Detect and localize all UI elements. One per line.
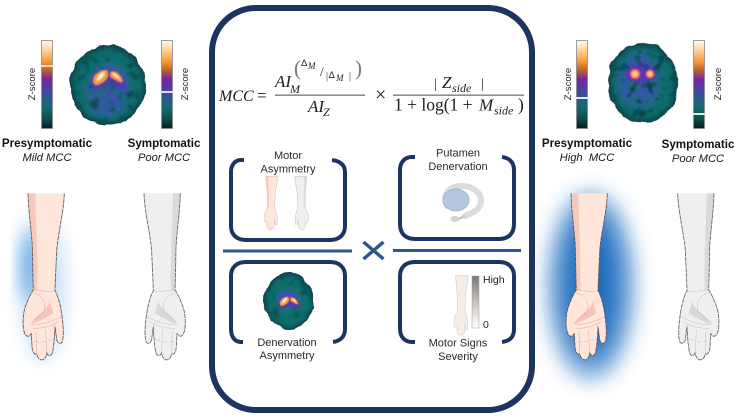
brain scan: mini bbox=[264, 273, 314, 329]
arm: right gray bbox=[678, 193, 719, 360]
formula: MCC equation: ) bbox=[518, 94, 524, 114]
quadrant: motor asymmetry: Motor bbox=[274, 150, 302, 162]
formula: MCC equation: × bbox=[375, 84, 386, 106]
right glow: high denervation bbox=[549, 191, 633, 383]
label: left symptomatic: Poor MCC bbox=[138, 152, 191, 164]
divider right bbox=[393, 249, 521, 252]
formula: MCC equation: ( bbox=[294, 56, 301, 80]
quadrant: motor asymmetry: Asymmetry bbox=[260, 164, 316, 176]
quadrant: denervation asymmetry: Denervation bbox=[257, 337, 317, 349]
formula: MCC equation: Δ bbox=[301, 58, 308, 69]
colorbar: symptomatic right: Z-score bbox=[713, 68, 724, 100]
severity scale bbox=[472, 274, 505, 331]
formula: MCC equation: M bbox=[307, 61, 316, 71]
divider left bbox=[223, 250, 352, 252]
colorbar: presymptomatic left: Z-score bbox=[27, 68, 38, 100]
quadrant: motor signs severity: Severity bbox=[438, 351, 478, 363]
severity scale: 0 bbox=[483, 319, 489, 331]
formula: MCC equation: MCC bbox=[218, 88, 254, 105]
label: left presymptomatic: Mild MCC bbox=[22, 152, 72, 164]
quadrant: motor asymmetry bbox=[231, 150, 345, 240]
formula: MCC equation: M bbox=[335, 73, 344, 83]
formula: MCC equation: | bbox=[349, 71, 351, 82]
colorbar: symptomatic right bbox=[692, 40, 724, 128]
arm: right pink bbox=[566, 193, 607, 360]
label: right symptomatic: Symptomatic bbox=[662, 138, 735, 151]
colorbar: presymptomatic right bbox=[563, 40, 589, 128]
label: right symptomatic bbox=[662, 138, 735, 165]
quadrant: putamen denervation: Denervation bbox=[428, 161, 488, 173]
formula: MCC equation: 1 + log(1 + bbox=[394, 94, 473, 114]
severity scale: High bbox=[483, 274, 505, 286]
formula: MCC equation: M bbox=[478, 96, 494, 114]
colorbar: symptomatic left: Z-score bbox=[180, 68, 191, 100]
label: right presymptomatic: High MCC bbox=[560, 152, 615, 164]
formula: MCC equation: Δ bbox=[328, 70, 336, 81]
colorbar: presymptomatic right: Z-score bbox=[563, 68, 574, 100]
formula: MCC equation: AI bbox=[307, 97, 325, 116]
quadrant: denervation asymmetry: Asymmetry bbox=[260, 350, 315, 362]
label: left symptomatic: Symptomatic bbox=[128, 137, 201, 150]
formula: MCC equation: | bbox=[326, 71, 328, 82]
mini arm: gray bbox=[295, 176, 308, 230]
formula: MCC equation: Z bbox=[323, 105, 330, 119]
mini arm: pink bbox=[264, 176, 278, 230]
label: right symptomatic: Poor MCC bbox=[672, 153, 725, 165]
formula: MCC equation: side bbox=[452, 81, 472, 95]
formula: MCC equation: = bbox=[257, 86, 267, 105]
arm: left gray bbox=[144, 193, 185, 360]
formula: MCC equation: | bbox=[481, 77, 484, 92]
label: left presymptomatic bbox=[2, 137, 93, 164]
formula: MCC equation: | bbox=[434, 77, 437, 92]
label: right presymptomatic: Presymptomatic bbox=[542, 137, 633, 150]
left scan group bbox=[27, 40, 191, 128]
label: right presymptomatic bbox=[542, 137, 633, 164]
mini arm: severity bbox=[454, 275, 468, 336]
formula: MCC equation: side bbox=[494, 104, 514, 118]
quadrant: putamen denervation bbox=[400, 148, 514, 239]
icon: multiply cross bbox=[364, 242, 384, 259]
colorbar: presymptomatic left bbox=[27, 40, 54, 128]
brain scan: left bbox=[70, 45, 146, 125]
formula: MCC equation: Z bbox=[442, 73, 452, 92]
quadrant: motor signs severity: Motor Signs bbox=[429, 338, 488, 350]
label: left symptomatic bbox=[128, 137, 201, 164]
formula: MCC equation: AI bbox=[274, 72, 292, 91]
label: left presymptomatic: Presymptomatic bbox=[2, 137, 93, 150]
brain scan: right bbox=[604, 40, 682, 126]
quadrant: putamen denervation: Putamen bbox=[436, 148, 480, 160]
formula: MCC equation: M bbox=[289, 82, 301, 96]
panel: central formula frame bbox=[212, 8, 532, 410]
right scan group bbox=[563, 40, 724, 129]
formula: MCC equation: / bbox=[320, 64, 324, 79]
quadrant: motor signs severity bbox=[400, 262, 514, 363]
formula: MCC equation bbox=[218, 56, 524, 119]
left glow: mild denervation bbox=[21, 216, 65, 360]
arm: left pink bbox=[23, 193, 64, 360]
quadrant: denervation asymmetry bbox=[231, 262, 345, 362]
formula: MCC equation: ) bbox=[355, 56, 362, 80]
colorbar: symptomatic left bbox=[160, 40, 191, 128]
icon: putamen bbox=[443, 186, 481, 222]
